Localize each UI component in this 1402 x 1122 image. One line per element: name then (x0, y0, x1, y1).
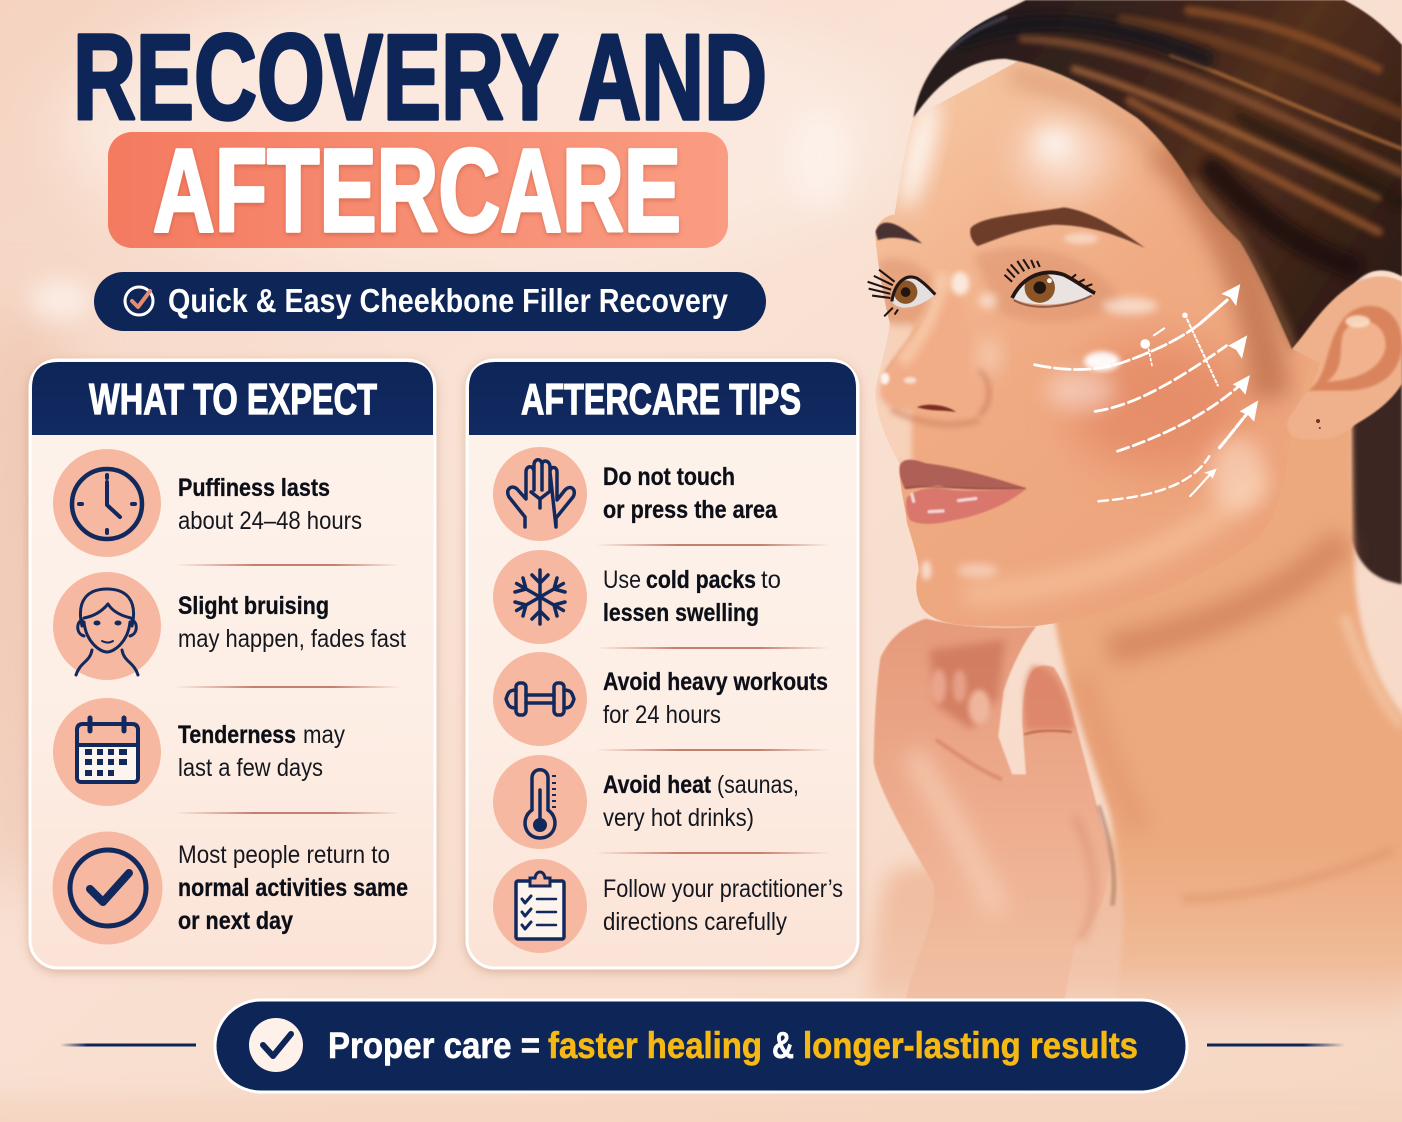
text: heat: very hot drinks) (603, 804, 754, 832)
lips (900, 460, 1026, 524)
text: tenderness (178, 721, 345, 782)
panel heading: AFTERCARE TIPS (521, 375, 801, 424)
text: do not touch: Do not touch (603, 463, 735, 491)
icon: clock (53, 449, 161, 557)
near eye (1005, 259, 1095, 307)
callout text: longer-lasting results (803, 1025, 1138, 1066)
panel heading (469, 362, 856, 435)
hand under chin (874, 619, 1109, 1003)
shadow between hand and neck (1099, 805, 1114, 906)
text: bruising: Slight bruising (178, 592, 329, 620)
icon: clipboard (493, 859, 587, 953)
icon: check badge (125, 287, 153, 315)
callout text: Proper care = (328, 1025, 540, 1066)
panel heading: WHAT TO EXPECT (89, 375, 377, 424)
text: bruising (178, 592, 406, 653)
hair behind neck (1351, 346, 1402, 584)
text: heat (603, 771, 799, 832)
callout text: & (772, 1025, 794, 1066)
nostril (917, 405, 956, 412)
lifting arrows on cheek (1035, 284, 1258, 501)
fingers (929, 640, 1005, 729)
text: cold packs: to (761, 566, 781, 594)
text: normal activities: normal activities same (178, 874, 408, 902)
wispy hairline (1188, 180, 1294, 349)
text: puffiness (178, 474, 362, 535)
text: cold packs: cold packs (646, 566, 756, 594)
text: heat: Avoid heat (603, 771, 712, 799)
text: directions: directions carefully (603, 908, 787, 936)
icon: thermometer (493, 755, 587, 849)
text: puffiness: Puffiness lasts (178, 474, 330, 502)
text: cold packs: Use (603, 566, 641, 594)
subtitle pill: Quick & Easy Cheekbone Filler Recovery (168, 282, 729, 319)
far eye (868, 270, 935, 316)
eyebrows (876, 207, 1145, 248)
bottom callout (215, 1000, 1187, 1092)
text: cold packs (603, 566, 781, 627)
ear (1287, 276, 1402, 440)
text: cold packs: lessen swelling (603, 599, 759, 627)
callout text (328, 1025, 1138, 1066)
text: puffiness: about 24–48 hours (178, 507, 362, 535)
temple shadow (1164, 145, 1271, 398)
title line 1: RECOVERY AND (73, 9, 767, 145)
icon: dumbbell (493, 652, 587, 746)
text: tenderness: last a few days (178, 754, 323, 782)
icon: hand (493, 447, 587, 541)
photo: woman in profile (867, 0, 1402, 1037)
text: workouts: for 24 hours (603, 701, 721, 729)
text: normal activities: Most people return to (178, 841, 390, 869)
text: do not touch (603, 463, 778, 524)
subtitle pill (94, 272, 766, 331)
icon: check (52, 832, 162, 944)
cheek highlight (1084, 352, 1120, 371)
text: directions: Follow your practitioner’s (603, 875, 843, 903)
face (867, 35, 1316, 627)
jaw glow (964, 477, 1264, 595)
lower arm and chest glow (867, 830, 1402, 1037)
text: workouts (603, 668, 828, 729)
eye sockets (974, 247, 1123, 322)
neck shading (1081, 674, 1140, 830)
text: tenderness: may (303, 721, 345, 749)
panel: what to expect (30, 360, 435, 968)
panel: aftercare tips (467, 360, 858, 968)
text: heat: (saunas, (717, 771, 799, 799)
decorative line right (1207, 1044, 1345, 1046)
text: normal activities: or next day (178, 907, 293, 935)
panel heading (32, 362, 433, 435)
title badge: aftercare: AFTERCARE (153, 125, 681, 257)
icon: calendar (53, 698, 161, 806)
text: do not touch: or press the area (603, 496, 778, 524)
icon: face (53, 572, 161, 680)
icon: snowflake (493, 550, 587, 644)
forehead highlights (892, 92, 946, 212)
text: workouts: Avoid heavy workouts (603, 668, 828, 696)
icon: check circle (249, 1018, 303, 1072)
text: bruising: may happen, fades fast (178, 625, 406, 653)
text: tenderness: Tenderness (178, 721, 296, 749)
cheek blush (1067, 339, 1247, 470)
callout text: faster healing (548, 1025, 762, 1066)
text: directions (603, 875, 843, 936)
nose (878, 338, 915, 413)
far cheek (876, 320, 914, 464)
text: normal activities (178, 841, 408, 935)
hair (914, 0, 1402, 349)
decorative line left (60, 1044, 196, 1046)
neck and chest (1054, 328, 1402, 1037)
